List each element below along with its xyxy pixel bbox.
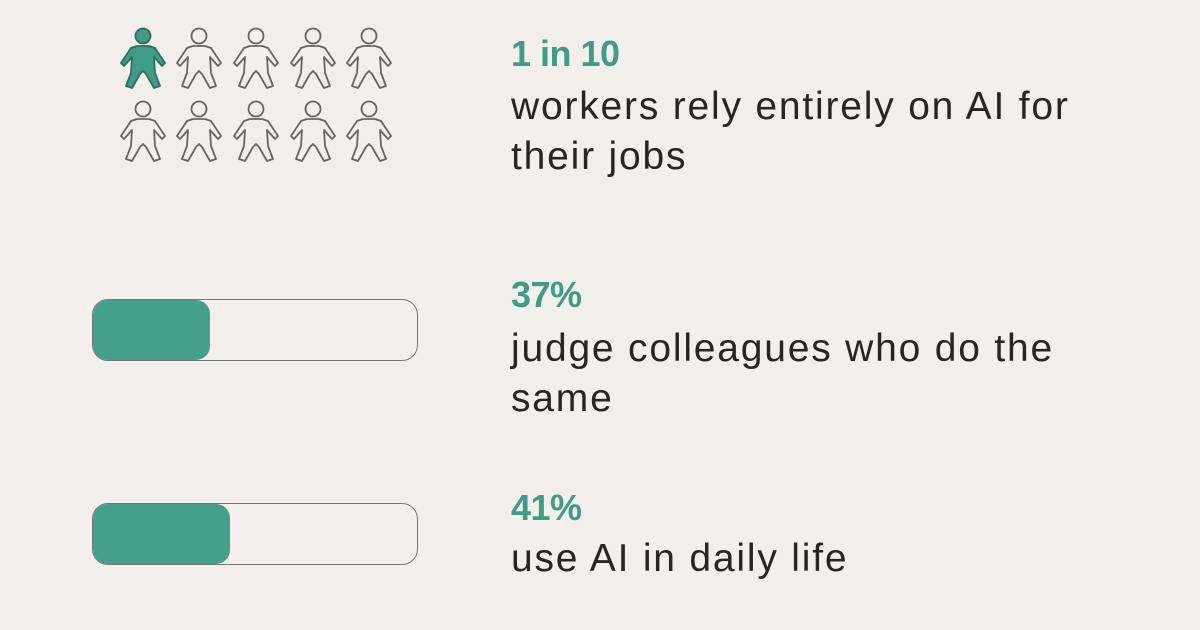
- stat 2 text: [510, 327, 1054, 420]
- stat 1 text: [511, 85, 1070, 178]
- bar 2: [92, 503, 418, 565]
- stat 2 number: 37%: [511, 274, 582, 315]
- stat 1 number: 1 in 10: [511, 33, 620, 74]
- stat 1 text: their jobs: [511, 135, 687, 178]
- stat 1 text: workers rely entirely on AI for: [511, 85, 1070, 128]
- stat 2 text: same: [511, 377, 614, 420]
- icon: filled person: [121, 28, 165, 88]
- stat 2 text: judge colleagues who do the: [511, 327, 1054, 370]
- stat 3 text: use AI in daily life: [511, 537, 848, 580]
- bar 1: [92, 299, 418, 361]
- stat 3 number: 41%: [511, 487, 582, 528]
- icon grid: people: [120, 28, 392, 162]
